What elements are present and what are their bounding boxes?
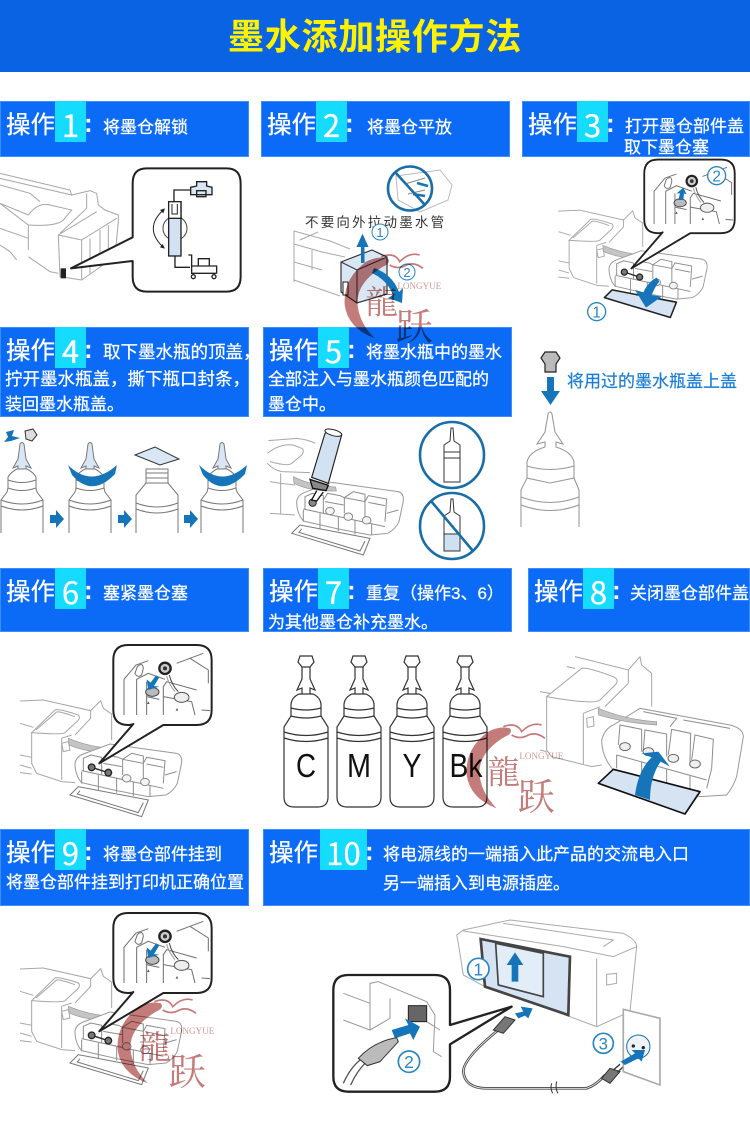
illustration: step 10 power connection xyxy=(333,920,660,1093)
banner: step 10: 另一端插入到电源插座。 xyxy=(383,874,570,893)
banner: step 3: : xyxy=(606,108,615,138)
illustration: re-cap used bottle xyxy=(521,352,579,527)
indicator xyxy=(61,268,66,278)
arrow: lift up xyxy=(358,236,367,262)
banner: step 8: 8 xyxy=(590,568,607,613)
number 2 xyxy=(398,1051,420,1072)
watermark: step 9: 龍 xyxy=(138,1021,171,1068)
watermark: step 2: 龍 xyxy=(365,276,398,323)
callout: lock lever xyxy=(71,168,241,292)
cap xyxy=(541,352,560,372)
tank unit xyxy=(602,708,743,797)
bottle Y: Y xyxy=(402,747,422,784)
printer xyxy=(457,920,637,1027)
banner: step 5: : xyxy=(347,334,356,364)
power cord xyxy=(463,1007,623,1093)
banner: step 8 xyxy=(528,568,750,632)
banner: step 1: 操作 xyxy=(6,112,55,139)
watermark: step 9 xyxy=(118,999,214,1096)
tank unit xyxy=(292,477,403,555)
warning text: 不要向外拉动墨水管 xyxy=(305,215,446,230)
banner: step 7: 操作 xyxy=(269,579,318,606)
bottle C xyxy=(284,656,328,807)
banner: step 4: 拧开墨水瓶盖，撕下瓶口封条， xyxy=(5,369,249,389)
illustration: step 5 fill tanks xyxy=(267,422,484,559)
banner: step 9: : xyxy=(84,836,93,866)
bottle 2 twist cap xyxy=(68,442,117,533)
illustration: step 4 bottle sequence xyxy=(1,429,247,533)
illustration: step 3 open cover and remove plug xyxy=(558,160,735,321)
bottle 3 with seal xyxy=(135,447,179,533)
watermark: step 7: LONGYUE xyxy=(519,751,563,762)
bottle pouring xyxy=(309,428,342,506)
watermark: step 9: 跃 xyxy=(168,1042,206,1096)
title: 墨水添加操作方法 xyxy=(228,16,522,57)
banner: step 10: : xyxy=(365,836,374,866)
arrow: open door xyxy=(635,278,662,308)
bottle Y xyxy=(390,656,434,807)
banner: step 3 xyxy=(522,101,750,157)
banner: step 1: : xyxy=(84,108,93,138)
banner: step 7: 为其他墨仓补充墨水。 xyxy=(268,613,438,632)
bottle 1 with cap off xyxy=(1,429,43,533)
banner: step 1: 将墨仓解锁 xyxy=(103,118,188,137)
banner: step 2: 2 xyxy=(323,101,340,146)
printer body xyxy=(540,657,652,767)
door xyxy=(598,769,700,814)
watermark: step 7: 龍 xyxy=(487,746,520,793)
illustration: step 1 printer and unlock callout xyxy=(0,168,241,292)
wrong: bottle half empty xyxy=(420,493,484,559)
banner: step 9 xyxy=(0,829,249,906)
banner: step 4: : xyxy=(84,334,93,364)
watermark: step 2: LONGYUE xyxy=(397,281,441,292)
illustration: step 6 plug tank xyxy=(20,645,212,817)
arrow: close door xyxy=(635,752,670,800)
banner: step 3: 操作 xyxy=(528,112,577,139)
banner: step 3: 3 xyxy=(584,101,601,146)
banner: step 10: 操作 xyxy=(269,840,318,867)
banner: step 5: 5 xyxy=(325,327,342,372)
watermark: step 9: LONGYUE xyxy=(170,1026,214,1037)
banner: step 1: 1 xyxy=(62,101,79,146)
watermark: step 2 xyxy=(345,254,441,351)
banner: step 5: 全部注入与墨水瓶颜色匹配的 xyxy=(268,370,489,389)
number 1 xyxy=(372,224,388,240)
banner: step 8: : xyxy=(612,575,621,605)
banner: step 6: : xyxy=(84,575,93,605)
banner: step 8: 操作 xyxy=(534,579,583,606)
number 2: 2 xyxy=(403,265,411,280)
banner: step 4: 4 xyxy=(62,327,79,372)
banner: step 10: 10 xyxy=(326,829,361,874)
banner: step 5: 墨仓中。 xyxy=(268,395,336,414)
banner: step 4 xyxy=(0,327,249,417)
printer and tank xyxy=(294,231,387,303)
banner: step 7: 重复（操作3、6） xyxy=(366,584,504,603)
illustration: step 7 CMYK bottles xyxy=(284,656,487,807)
banner: step 2 xyxy=(261,101,510,157)
banner: step 7: : xyxy=(347,575,356,605)
illustration: step 9 hang unit xyxy=(20,913,212,1085)
number 2 xyxy=(399,264,415,280)
banner: step 1 xyxy=(0,101,249,157)
wall socket xyxy=(621,1009,660,1085)
bottle Bk: Bk xyxy=(450,747,483,784)
arrow up xyxy=(507,952,523,982)
banner: step 3: 取下墨仓塞 xyxy=(624,138,709,157)
banner: step 6: 操作 xyxy=(6,579,55,606)
correct: bottle upright xyxy=(420,422,484,488)
banner: step 10 xyxy=(263,829,750,906)
banner: step 3: 打开墨仓部件盖 xyxy=(625,117,744,136)
arrow down xyxy=(541,377,560,405)
icon: prohibited pull xyxy=(388,166,452,212)
number 2: 2 xyxy=(404,1052,414,1072)
watermark: step 7: 跃 xyxy=(517,767,555,821)
banner: step 9: 将墨仓部件挂到打印机正确位置 xyxy=(6,873,244,892)
banner: step 8: 关闭墨仓部件盖 xyxy=(630,584,749,603)
arrow xyxy=(184,510,198,528)
arrow: lay flat xyxy=(372,268,403,303)
banner: step 2: : xyxy=(345,108,354,138)
callout: power socket xyxy=(333,975,512,1092)
watermark: step 2: 跃 xyxy=(395,297,433,351)
banner: step 9: 操作 xyxy=(6,840,55,867)
banner: step 5 xyxy=(263,327,512,417)
banner: step 10: 将电源线的一端插入此产品的交流电入口 xyxy=(383,845,689,864)
bottle M: M xyxy=(347,747,371,784)
side note: cap the used bottle: 将用过的墨水瓶盖上盖 xyxy=(567,372,737,391)
banner: step 6: 塞紧墨仓塞 xyxy=(103,584,188,603)
number 2: 2 xyxy=(712,168,721,185)
bottle M xyxy=(337,656,381,807)
number 1: 1 xyxy=(376,225,384,240)
illustration: step 2 keep tank flat xyxy=(294,166,452,303)
banner: step 5: 将墨水瓶中的墨水 xyxy=(366,343,502,362)
number 1: 1 xyxy=(473,959,483,979)
arrow xyxy=(50,510,64,528)
rear cover xyxy=(481,939,570,1015)
watermark: step 7 xyxy=(467,724,563,821)
bottle C: C xyxy=(296,747,316,784)
banner: step 2: 将墨仓平放 xyxy=(367,118,452,137)
banner: step 7 xyxy=(263,568,512,632)
bottle 4 twist cap back xyxy=(199,442,247,533)
number 1 xyxy=(468,958,489,980)
arrow xyxy=(118,510,132,528)
illustration: step 8 close cover xyxy=(540,657,743,814)
banner: step 9: 9 xyxy=(62,829,79,874)
banner: step 5: 操作 xyxy=(269,338,318,365)
number 2 xyxy=(708,167,726,185)
number 1: 1 xyxy=(592,304,601,321)
banner: step 6 xyxy=(0,568,249,632)
banner: step 7: 7 xyxy=(325,568,342,613)
banner: step 9: 将墨仓部件挂到 xyxy=(103,845,222,864)
title xyxy=(0,0,750,72)
banner: step 6: 6 xyxy=(62,568,79,613)
bottle Bk xyxy=(443,656,487,807)
arrow: plug up xyxy=(677,188,687,200)
banner: step 4: 操作 xyxy=(6,338,55,365)
banner: step 4: 装回墨水瓶盖。 xyxy=(5,395,124,414)
number 1 xyxy=(588,303,606,321)
number 3: 3 xyxy=(599,1034,608,1053)
printer xyxy=(267,438,315,515)
number 3 xyxy=(593,1033,613,1053)
banner: step 2: 操作 xyxy=(267,112,316,139)
